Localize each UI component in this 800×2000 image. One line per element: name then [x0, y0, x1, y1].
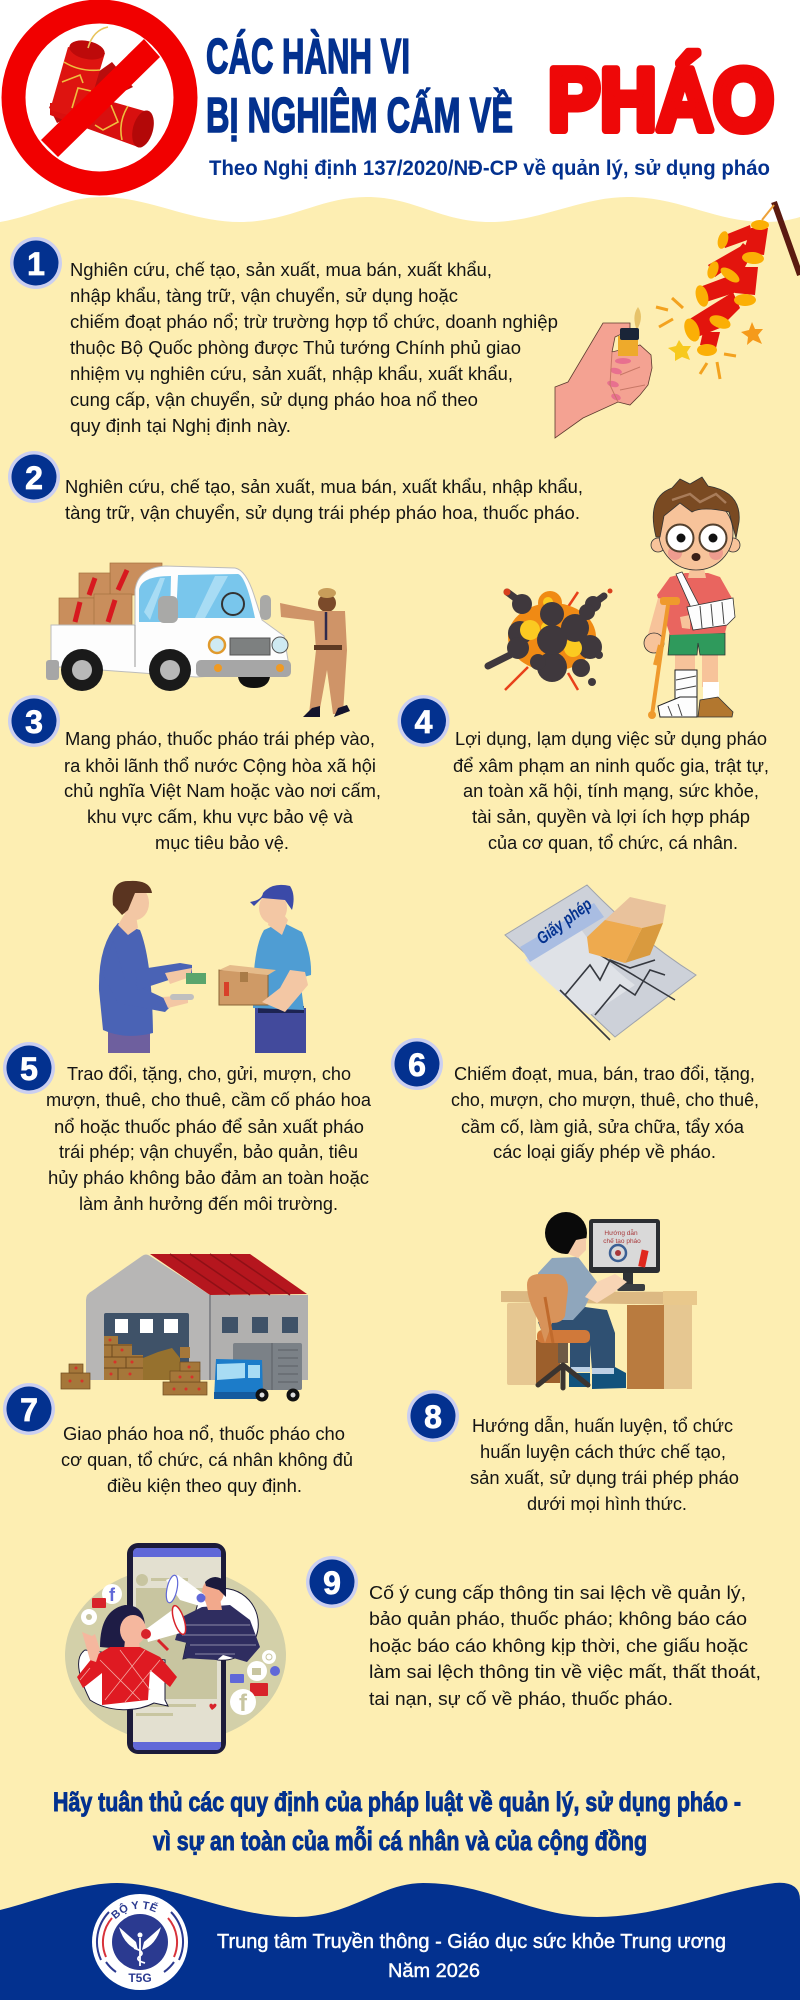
social media icons	[81, 1584, 280, 1717]
badge 1: 1	[27, 246, 45, 282]
text: rule 5: Trao đổi, tặng, cho, gửi, mượn, cho	[67, 1063, 351, 1084]
text: rule 3: chủ nghĩa Việt Nam hoặc vào nơi cấm,	[64, 780, 381, 801]
footer organization name: Trung tâm Truyền thông - Giáo dục sức khỏe Trung ương	[217, 1930, 726, 1953]
badge 6	[391, 1038, 443, 1090]
text: rule 9: làm sai lệch thông tin về việc mất, thất thoát,	[369, 1661, 761, 1682]
text: rule 3: ra khỏi lãnh thổ nước Cộng hòa xã hội	[64, 755, 376, 776]
text: rule 1: Nghiên cứu, chế tạo, sản xuất, mua bán, xuất khẩu,	[70, 259, 492, 280]
text: rule 4: của cơ quan, tổ chức, cá nhân.	[488, 832, 738, 853]
text: rule 2: Nghiên cứu, chế tạo, sản xuất, mua bán, xuất khẩu, nhập khẩu,	[65, 476, 583, 497]
logo: Bộ Y tế T5G: T5G	[128, 1971, 152, 1985]
badge 7: 7	[20, 1392, 38, 1428]
text: rule 1: nhiệm vụ nghiên cứu, sản xuất, nhập khẩu, xuất khẩu,	[70, 363, 513, 384]
badge 7	[3, 1383, 55, 1435]
text: rule 2	[65, 476, 583, 523]
text: rule 8: dưới mọi hình thức.	[527, 1493, 687, 1514]
text: rule 5: nổ hoặc thuốc pháo để sản xuất pháo	[54, 1116, 364, 1137]
text: rule 6: cho, mượn, cho mượn, thuê, cho thuê,	[451, 1089, 759, 1110]
text: rule 4: để xâm phạm an ninh quốc gia, trật tự,	[453, 755, 769, 776]
text: rule 1: quy định tại Nghị định này.	[70, 415, 291, 436]
badge 2	[8, 451, 60, 503]
text: rule 7: điều kiện theo quy định.	[107, 1475, 302, 1496]
prohibition sign	[14, 12, 186, 184]
text: rule 8: Hướng dẫn, huấn luyện, tổ chức	[472, 1415, 733, 1436]
text: rule 9: tai nạn, sự cố về pháo, thuốc pháo.	[369, 1688, 673, 1709]
badge 9: 9	[323, 1565, 341, 1601]
man in speech bubble	[164, 1574, 260, 1662]
text: rule 3: khu vực cấm, khu vực bảo vệ và	[87, 806, 354, 827]
illustration: phone with two people shouting through megaphones	[65, 1543, 286, 1754]
illustration: person at computer with firecracker guide: chế tạo pháo	[603, 1236, 641, 1245]
subtitle: Theo Nghị định 137/2020/NĐ-CP về quản lý, sử dụng pháo	[209, 156, 770, 180]
title: BỊ NGHIÊM CẤM VỀ	[206, 88, 513, 143]
badge 3	[8, 695, 60, 747]
text: rule 9: Cố ý cung cấp thông tin sai lệch về quản lý,	[369, 1582, 746, 1603]
badge 1	[10, 237, 62, 289]
footer year: Năm 2026	[388, 1960, 480, 1982]
illustration: man handing money to delivery worker	[99, 881, 311, 1053]
illustration: warehouse with boxes and truck	[61, 1254, 308, 1402]
illustration: truck with firecracker boxes and police officer	[46, 563, 350, 717]
text: rule 5	[46, 1063, 372, 1214]
badge 6: 6	[408, 1047, 426, 1083]
text: rule 7: cơ quan, tổ chức, cá nhân không đủ	[61, 1449, 353, 1470]
illustration: injured boy with crutch	[644, 477, 740, 719]
badge 8: 8	[424, 1399, 442, 1435]
title word: PHÁO: PHÁO	[548, 50, 774, 149]
woman in speech bubble	[77, 1604, 188, 1710]
text: rule 6: các loại giấy phép về pháo.	[493, 1141, 716, 1162]
text: rule 8	[470, 1415, 739, 1514]
text: rule 8: sản xuất, sử dụng trái phép pháo	[470, 1467, 739, 1488]
badge 5: 5	[20, 1051, 38, 1087]
text: rule 1: thuộc Bộ Quốc phòng được Thủ tướng Chính phủ giao	[70, 337, 521, 358]
illustration: person at computer with firecracker guide: Hướng dẫn	[604, 1228, 638, 1237]
badge 2: 2	[25, 460, 43, 496]
text: rule 4: an toàn xã hội, tính mạng, sức khỏe,	[463, 780, 759, 801]
text: rule 8: huấn luyện cách thức chế tạo,	[480, 1441, 726, 1462]
text: rule 5: làm ảnh hưởng đến môi trường.	[79, 1193, 338, 1214]
badge 4	[398, 695, 450, 747]
text: rule 1	[70, 259, 558, 436]
text: rule 5: hủy pháo không bảo đảm an toàn hoặc	[48, 1167, 369, 1188]
text: rule 1: chiếm đoạt pháo nổ; trừ trường hợp tổ chức, doanh nghiệp	[70, 311, 558, 332]
text: rule 9	[369, 1582, 761, 1709]
text: rule 4: tài sản, quyền và lợi ích hợp pháp	[472, 806, 750, 827]
text: rule 1: nhập khẩu, tàng trữ, vận chuyển, sử dụng hoặc	[70, 285, 458, 306]
text: rule 5: mượn, thuê, cho thuê, cầm cố pháo hoa	[46, 1089, 372, 1110]
text: rule 6	[451, 1063, 759, 1162]
title: CÁC HÀNH VI	[206, 30, 410, 84]
text: rule 9: bảo quản pháo, thuốc pháo; không báo cáo	[369, 1608, 747, 1629]
text: rule 3: Mang pháo, thuốc pháo trái phép vào,	[65, 728, 375, 749]
text: rule 6: Chiếm đoạt, mua, bán, trao đổi, tặng,	[454, 1063, 755, 1084]
footer band	[0, 1883, 800, 2000]
text: rule 3	[64, 728, 381, 853]
closing slogan: vì sự an toàn của mỗi cá nhân và của cộng đồng	[153, 1825, 647, 1856]
badge 8	[407, 1390, 459, 1442]
closing slogan	[53, 1787, 741, 1856]
text: rule 7: Giao pháo hoa nổ, thuốc pháo cho	[63, 1423, 345, 1444]
illustration: hand lighting firecrackers	[555, 202, 800, 438]
text: rule 5: trái phép; vận chuyển, bảo quản, tiêu	[59, 1141, 358, 1162]
title	[206, 30, 513, 143]
text: rule 4	[453, 728, 769, 853]
text: rule 7	[61, 1423, 353, 1496]
text: rule 2: tàng trữ, vận chuyển, sử dụng trái phép pháo hoa, thuốc pháo.	[65, 502, 580, 523]
text: rule 1: cung cấp, vận chuyển, sử dụng pháo hoa nổ theo	[70, 389, 478, 410]
social media icons: f	[109, 1585, 116, 1605]
text: rule 9: hoặc báo cáo không kịp thời, che giấu hoặc	[369, 1635, 748, 1656]
badge 9	[306, 1556, 358, 1608]
social media icons: f	[239, 1690, 248, 1717]
icon: prohibited firecrackers	[14, 12, 186, 184]
text: rule 3: mục tiêu bảo vệ.	[155, 832, 289, 853]
illustration: licence paper and eraser	[505, 885, 696, 1040]
illustration: licence paper and eraser: Giấy phép	[533, 895, 596, 948]
logo: Bộ Y tế T5G	[92, 1894, 188, 1990]
text: rule 4: Lợi dụng, lạm dụng việc sử dụng pháo	[455, 728, 767, 749]
illustration: explosion	[488, 588, 612, 690]
badge 4: 4	[415, 704, 433, 740]
badge 3: 3	[25, 704, 43, 740]
logo: Bộ Y tế T5G: BỘ Y TẾ	[110, 1901, 158, 1919]
badge 5	[3, 1042, 55, 1094]
text: rule 6: cầm cố, làm giả, sửa chữa, tẩy xóa	[461, 1116, 745, 1137]
illustration: person at computer with firecracker guide	[501, 1212, 697, 1389]
